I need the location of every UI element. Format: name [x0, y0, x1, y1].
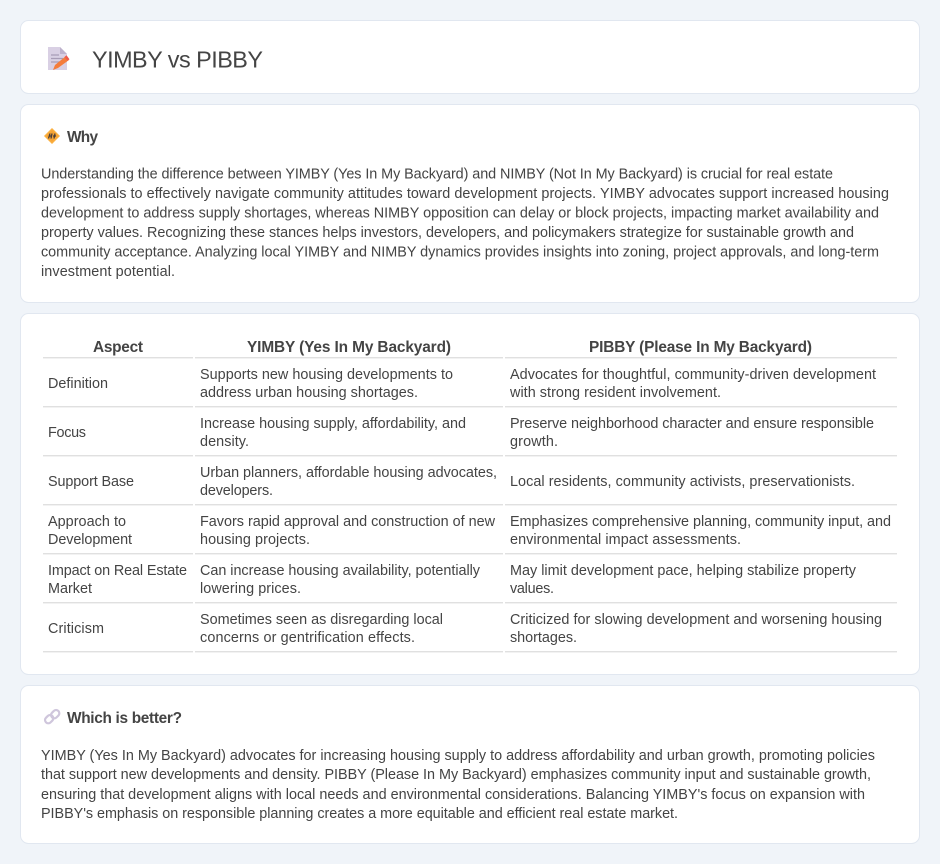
table row: support base	[43, 465, 897, 505]
table row: approach to development: housing projects.	[200, 532, 310, 548]
table row: impact on real estate market: May limit development pace, helping stabilize property	[510, 563, 857, 579]
table row: focus: Preserve neighborhood character and ensure responsible	[510, 416, 874, 432]
table row: focus: Focus	[48, 425, 86, 441]
text block: which is better paragraph: YIMBY (Yes In My Backyard) advocates for increasing housing supply to address affordability and urban growth, promoting policies	[41, 748, 875, 764]
table row: support base: developers.	[200, 483, 273, 499]
table row: support base: Urban planners, affordable housing advocates,	[200, 465, 497, 481]
table row: criticism	[43, 612, 897, 652]
table row: definition: Advocates for thoughtful, community-driven development	[510, 367, 876, 383]
table row: support base: Local residents, community activists, preservationists.	[510, 474, 855, 490]
table row: definition: Definition	[48, 376, 108, 392]
table header: Aspect	[93, 339, 143, 356]
icon: document with pencil	[48, 47, 70, 70]
text block: which is better paragraph	[41, 748, 875, 822]
table row: definition	[43, 367, 897, 407]
text block: why paragraph: community acceptance. Analyzing local YIMBY and NIMBY dynamics provides insights into zoning, project approvals, and long-term	[41, 244, 879, 260]
table row: criticism: shortages.	[510, 630, 577, 646]
icon: diamond sign	[44, 128, 60, 144]
table row: impact on real estate market	[43, 563, 897, 603]
table row: criticism: concerns or gentrification effects.	[200, 630, 415, 646]
panel: title card	[20, 20, 920, 94]
table row: support base: Support Base	[48, 474, 134, 490]
table row: definition: with strong resident involvement.	[509, 385, 721, 401]
panel: why	[20, 104, 920, 302]
text block: which is better paragraph: ensuring that development aligns with local needs and environmental considerations. Balancing YIMBY's focus on expansion with	[41, 787, 865, 803]
text block: why paragraph: property values. Recognizing these stances helps investors, developers, and policymakers strategize for sustainable growth and	[41, 225, 854, 241]
text block: why paragraph: professionals to effectively navigate community attitudes toward development projects. YIMBY advocates support increased housing	[41, 186, 889, 202]
table header: PIBBY (Please In My Backyard)	[589, 339, 812, 356]
table row: focus	[43, 416, 897, 456]
text block: why paragraph: Understanding the difference between YIMBY (Yes In My Backyard) and NIMBY (Not In My Backyard) is crucial for real estate	[41, 166, 833, 182]
table row: approach to development: environmental impact assessments.	[510, 532, 741, 548]
table row: focus: growth.	[510, 434, 558, 450]
table row: impact on real estate market: Can increase housing availability, potentially	[200, 563, 481, 579]
table row: impact on real estate market: Impact on Real Estate	[48, 563, 187, 579]
table row: approach to development: Approach to	[48, 514, 126, 530]
text block: why paragraph: development to address supply shortages, whereas NIMBY opposition can delay or block projects, impacting market availability and	[41, 206, 879, 222]
panel: which is better	[20, 686, 920, 844]
table row: approach to development	[43, 514, 897, 554]
heading: why: Why	[67, 129, 98, 146]
table row: criticism: Criticized for slowing development and worsening housing	[510, 612, 882, 628]
title: YIMBY vs PIBBY	[92, 46, 263, 72]
heading: which is better: Which is better?	[67, 710, 182, 727]
text block: why paragraph: investment potential.	[41, 264, 175, 280]
text block: which is better paragraph: PIBBY's emphasis on responsible planning creates a more equitable and efficient real estate market.	[41, 806, 678, 822]
table header	[43, 339, 897, 358]
table row: definition: Supports new housing developments to	[200, 367, 453, 383]
table row: approach to development: Emphasizes comprehensive planning, community input, and	[510, 514, 891, 530]
panel: comparison table	[20, 314, 920, 674]
table row: definition: address urban housing shortages.	[200, 385, 418, 401]
table row: focus: density.	[200, 434, 249, 450]
table row: impact on real estate market: Market	[48, 581, 92, 597]
text block: which is better paragraph: that support new developments and density. PIBBY (Please In My Backyard) emphasizes community input and sustainable growth,	[41, 767, 871, 783]
table row: approach to development: Development	[48, 532, 132, 548]
text block: why paragraph	[41, 166, 889, 280]
icon: chain link	[44, 709, 61, 725]
table row: focus: Increase housing supply, affordability, and	[200, 416, 466, 432]
table row: criticism: Sometimes seen as disregarding local	[200, 612, 443, 628]
table row: impact on real estate market: values.	[510, 581, 554, 597]
table row: impact on real estate market: lowering prices.	[200, 581, 301, 597]
table row: criticism: Criticism	[48, 621, 104, 637]
table header: YIMBY (Yes In My Backyard)	[247, 339, 451, 356]
table row: approach to development: Favors rapid approval and construction of new	[200, 514, 496, 530]
